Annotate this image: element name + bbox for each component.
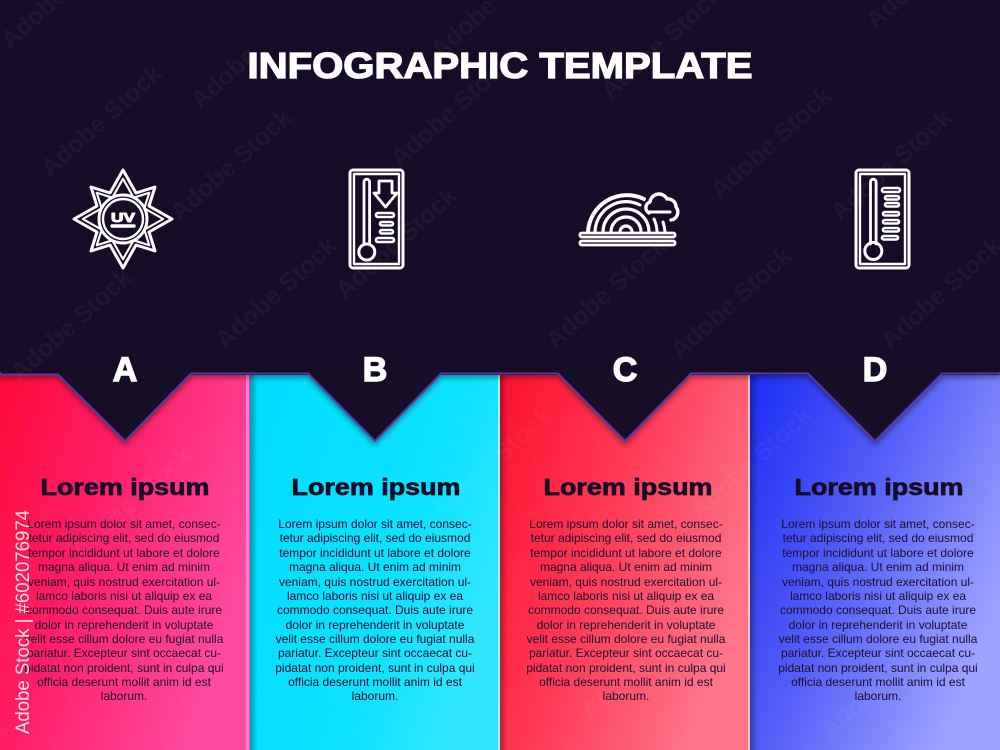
body: A: laborum. — [101, 689, 147, 703]
body: B: magna aliqua. Ut enim ad minim — [289, 560, 461, 574]
body: D — [778, 517, 978, 703]
body: C: officia deserunt mollit anim id est — [539, 675, 714, 689]
body: B: officia deserunt mollit anim id est — [288, 675, 463, 689]
body: C: pidatat non proident, sunt in culpa qui — [526, 661, 726, 675]
body: C: laborum. — [603, 689, 649, 703]
body: B: laborum. — [352, 689, 398, 703]
text block: D — [778, 474, 978, 703]
watermark pattern: Adobe Stock — [330, 181, 463, 304]
body: B: commodo consequat. Duis aute irure — [277, 603, 473, 617]
body: A: magna aliqua. Ut enim ad minim — [38, 560, 210, 574]
body: C: velit esse cillum dolore eu fugiat nulla — [527, 632, 726, 646]
body: A: commodo consequat. Duis aute irure — [26, 603, 222, 617]
watermark pattern: Adobe Stock — [210, 231, 343, 354]
body: D: dolor in reprehenderit in voluptate — [789, 618, 968, 632]
watermark pattern: Adobe Stock — [665, 241, 798, 364]
body: A: tetur adipiscing elit, sed do eiusmod — [29, 531, 219, 545]
body: D: pidatat non proident, sunt in culpa qui — [778, 661, 978, 675]
body: B: Lorem ipsum dolor sit amet, consec- — [278, 517, 472, 531]
body: B: lamco laboris nisi ut aliquip ex ea — [287, 589, 463, 603]
body: B: velit esse cillum dolore eu fugiat nulla — [276, 632, 475, 646]
body: A: velit esse cillum dolore eu fugiat nulla — [25, 632, 224, 646]
body: D: velit esse cillum dolore eu fugiat nulla — [779, 632, 978, 646]
body: A — [24, 517, 224, 703]
icon: UV sun — [74, 170, 172, 268]
body: B: tempor incididunt ut labore et dolore — [279, 546, 471, 560]
body: C: pariatur. Excepteur sint occaecat cu- — [529, 646, 723, 660]
body: A: dolor in reprehenderit in voluptate — [35, 618, 214, 632]
body: A: officia deserunt mollit anim id est — [37, 675, 212, 689]
body: A: veniam, quis nostrud exercitation ul- — [28, 575, 220, 589]
watermark pattern: Adobe Stock — [815, 621, 948, 744]
panel: D — [750, 375, 1000, 750]
heading: C: Lorem ipsum — [544, 474, 712, 500]
watermark pattern: Adobe Stock — [825, 103, 958, 226]
vertical stock credit: Adobe Stock | #602076974 — [13, 510, 34, 734]
watermark pattern: Adobe Stock — [540, 231, 673, 354]
body: C: veniam, quis nostrud exercitation ul- — [530, 575, 722, 589]
heading: B: Lorem ipsum — [292, 474, 460, 500]
title: INFOGRAPHIC TEMPLATE — [248, 45, 752, 86]
icon: thermometer with down arrow — [350, 170, 403, 268]
watermark pattern: Adobe Stock — [5, 263, 138, 386]
watermark pattern: Adobe — [185, 42, 262, 114]
body: B: dolor in reprehenderit in voluptate — [286, 618, 465, 632]
watermark pattern: Adobe Stock — [705, 81, 838, 204]
icon: rainbow with cloud — [580, 194, 678, 245]
watermark pattern: Adobe Stock — [35, 59, 168, 182]
body: A: tempor incididunt ut labore et dolore — [28, 546, 220, 560]
body: A: Lorem ipsum dolor sit amet, consec- — [27, 517, 221, 531]
body: D: tempor incididunt ut labore et dolore — [782, 546, 974, 560]
body: D: tetur adipiscing elit, sed do eiusmod — [783, 531, 973, 545]
icon: UV sun: UV — [111, 210, 135, 225]
body: A: lamco laboris nisi ut aliquip ex ea — [36, 589, 212, 603]
letter D: D — [863, 351, 887, 389]
body: A: pariatur. Excepteur sint occaecat cu- — [27, 646, 221, 660]
heading: A: Lorem ipsum — [40, 474, 210, 500]
letter A: A — [113, 351, 137, 389]
panel: A — [0, 375, 250, 750]
body: B: pidatat non proident, sunt in culpa qui — [275, 661, 475, 675]
heading: D: Lorem ipsum — [794, 474, 964, 500]
watermark pattern: Adobe Stock — [315, 581, 448, 704]
watermark pattern: Adobe Stock — [575, 601, 708, 724]
body: C: lamco laboris nisi ut aliquip ex ea — [538, 589, 714, 603]
body: B: tetur adipiscing elit, sed do eiusmod — [280, 531, 470, 545]
body: D: officia deserunt mollit anim id est — [791, 675, 966, 689]
body: B — [275, 517, 475, 703]
text block: B — [275, 474, 475, 703]
panel: C — [500, 375, 750, 750]
body: C: tetur adipiscing elit, sed do eiusmod — [531, 531, 721, 545]
body: D: laborum. — [855, 689, 901, 703]
text block: A — [24, 474, 224, 703]
body: C — [526, 517, 726, 703]
panel: B — [250, 375, 500, 750]
dark header with pointer notches — [0, 0, 1000, 441]
body: C: commodo consequat. Duis aute irure — [528, 603, 724, 617]
body: D: commodo consequat. Duis aute irure — [780, 603, 976, 617]
body: C: tempor incididunt ut labore et dolore — [530, 546, 722, 560]
watermark pattern: Adobe Stock — [425, 401, 558, 524]
text block: C — [526, 474, 726, 703]
watermark pattern: Adobe Stock — [685, 401, 818, 524]
letter C: C — [613, 351, 637, 389]
watermark pattern: Adobe Stock — [165, 103, 298, 226]
body: D: lamco laboris nisi ut aliquip ex ea — [790, 589, 966, 603]
body: B: pariatur. Excepteur sint occaecat cu- — [278, 646, 472, 660]
body: B: veniam, quis nostrud exercitation ul- — [279, 575, 471, 589]
letter B: B — [363, 351, 387, 389]
body: C: Lorem ipsum dolor sit amet, consec- — [529, 517, 723, 531]
watermark pattern: Adobe Stock — [385, 49, 518, 172]
body: A: pidatat non proident, sunt in culpa qui — [24, 661, 224, 675]
icon: thermometer — [856, 170, 909, 268]
body: D: Lorem ipsum dolor sit amet, consec- — [781, 517, 975, 531]
body: D: magna aliqua. Ut enim ad minim — [792, 560, 964, 574]
body: D: veniam, quis nostrud exercitation ul- — [782, 575, 974, 589]
watermark pattern: Adobe Stock — [65, 441, 198, 564]
body: C: magna aliqua. Ut enim ad minim — [540, 560, 712, 574]
body: D: pariatur. Excepteur sint occaecat cu- — [781, 646, 975, 660]
body: C: dolor in reprehenderit in voluptate — [537, 618, 716, 632]
